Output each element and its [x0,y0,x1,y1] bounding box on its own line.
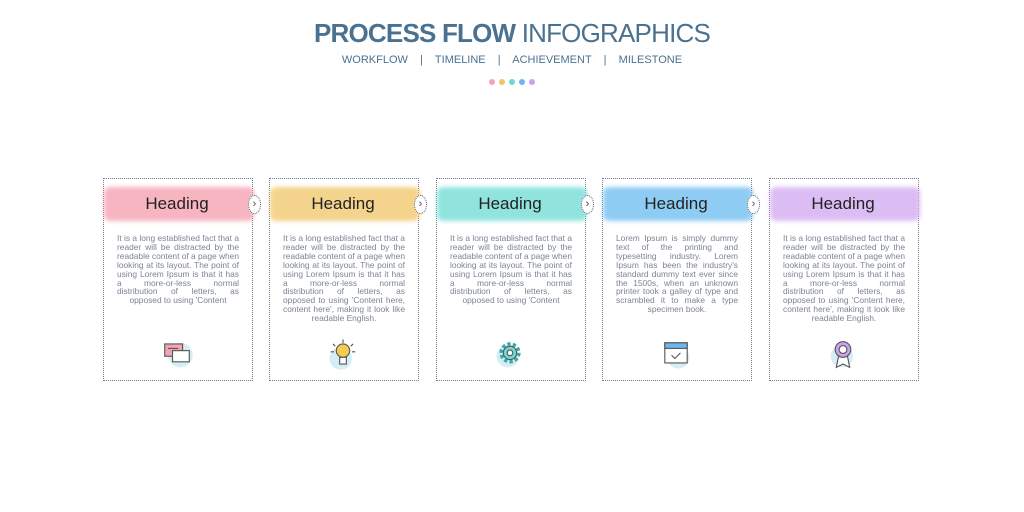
heading 5: Heading [811,194,875,213]
panel: card 1 [103,178,253,381]
arrow 2 [414,195,427,214]
heading 3: Heading [478,194,542,213]
subtitle: WORKFLOW | TIMELINE | ACHIEVEMENT | MILESTONE [342,54,682,66]
text 5: It is a long established fact that a reader will be distracted by the readable content of a page when looking at its layout. The point of using Lorem Ipsum is that it has a more-or-less normal distribution of letters, as opposed to using 'Content here, content here', making it look like readable English. [783,233,905,323]
heading 4: Heading [644,194,708,213]
text 4: Lorem Ipsum is simply dummy text of the printing and typesetting industry. Lorem Ipsum has been the industry's standard dummy text ever since the 1500s, when an unknown printer took a galley of type and scrambled it to make a type specimen book. [616,233,738,314]
panel: card 4 [602,178,752,381]
arrow 1: › [253,198,256,210]
arrow 1 [248,195,261,214]
panel: card 5 [769,178,919,381]
arrow 2: › [419,198,422,210]
icon: chat [164,342,193,368]
text 1: It is a long established fact that a reader will be distracted by the readable content of a page when looking at its layout. The point of using Lorem Ipsum is that it has a more-or-less normal distribution of letters, as opposed to using 'Content [117,233,239,305]
panel: card 3 [436,178,586,381]
dots [489,79,535,85]
panel: card 2 [269,178,419,381]
icon: bulb [330,340,356,370]
heading 2: Heading [311,194,375,213]
arrow 4 [747,195,760,214]
icon: calendar [664,342,690,368]
heading 1: Heading [145,194,209,213]
arrow 3: › [586,198,589,210]
title: PROCESS FLOW INFOGRAPHICS [314,18,710,48]
icon: award [830,341,853,368]
arrow 4: › [752,198,755,210]
text 2: It is a long established fact that a reader will be distracted by the readable content of a page when looking at its layout. The point of using Lorem Ipsum is that it has a more-or-less normal distribution of letters, as opposed to using 'Content here, content here', making it look like readable English. [283,233,405,323]
icon: gear [496,342,521,368]
arrow 3 [581,195,594,214]
text 3: It is a long established fact that a reader will be distracted by the readable content of a page when looking at its layout. The point of using Lorem Ipsum is that it has a more-or-less normal distribution of letters, as opposed to using 'Content [450,233,572,305]
